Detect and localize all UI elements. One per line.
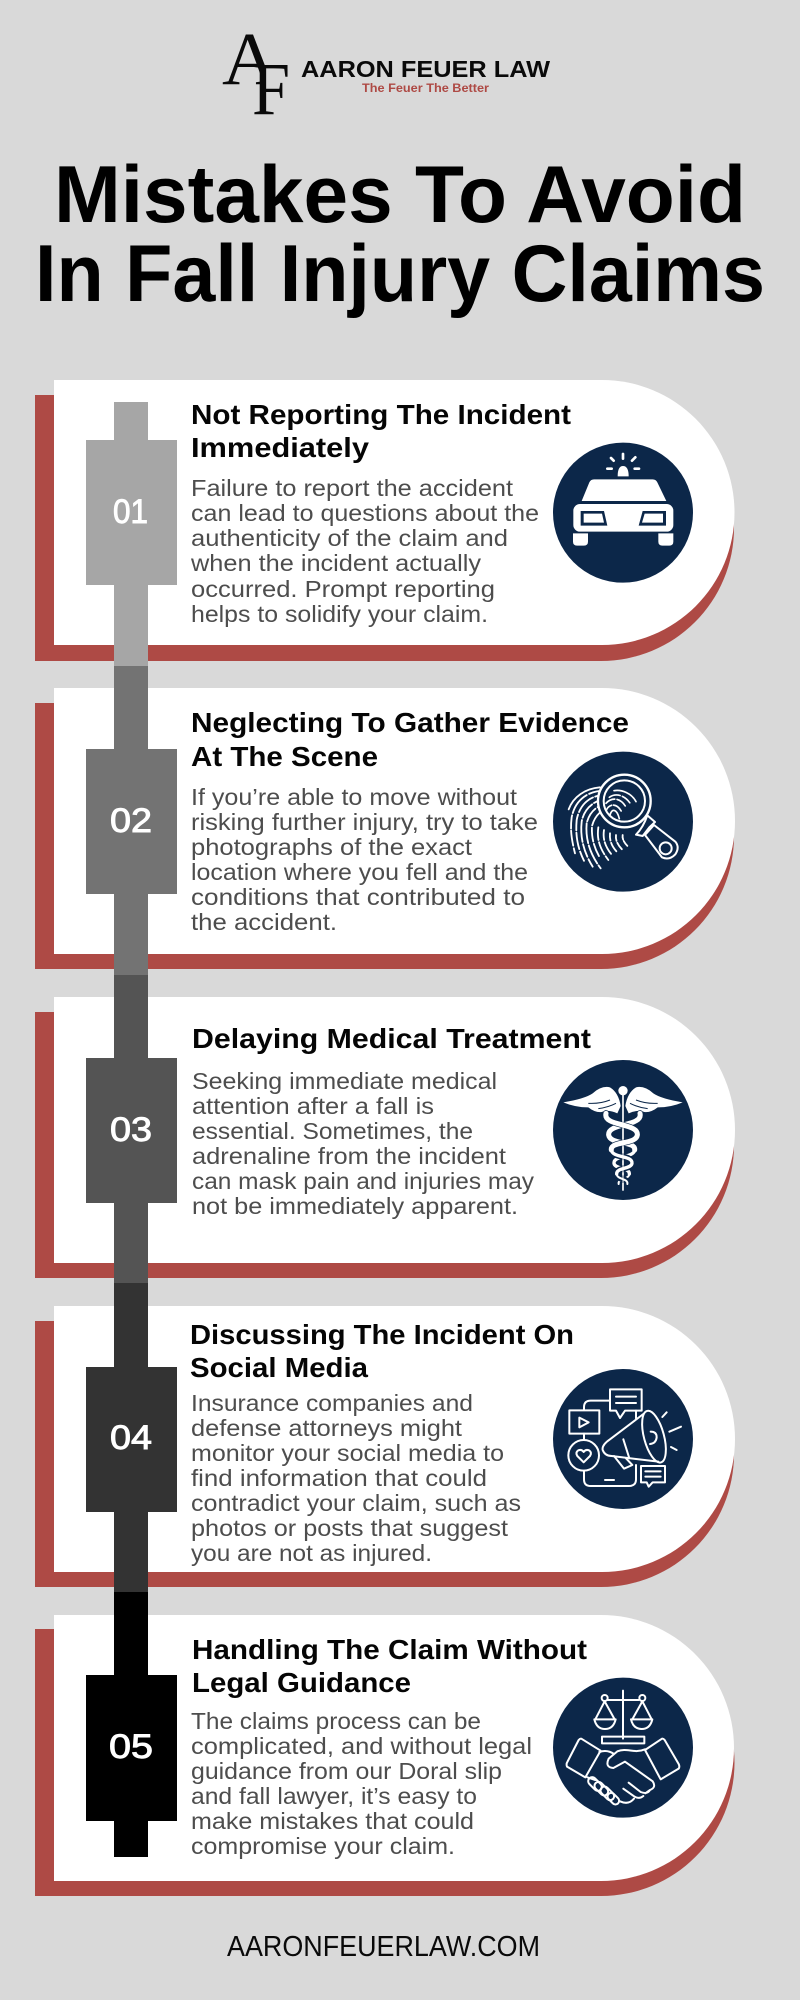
heading 04: Discussing The Incident On (190, 1319, 574, 1350)
logo monogram (222, 34, 288, 114)
title (35, 150, 765, 319)
heading 02: Neglecting To Gather Evidence (191, 707, 629, 738)
body text 03: attention after a fall is (192, 1093, 434, 1119)
heading 04 (190, 1319, 574, 1383)
body text 02: risking further injury, try to take (191, 809, 538, 835)
body text 04 (191, 1390, 521, 1566)
card background (54, 1615, 734, 1881)
heading 01: Not Reporting The Incident (191, 399, 571, 430)
card background (54, 380, 735, 645)
heading 01 (191, 399, 571, 463)
body text 05: make mistakes that could (191, 1808, 474, 1834)
body text 04: defense attorneys might (191, 1415, 463, 1441)
card background (54, 688, 735, 954)
icon: police car (553, 443, 693, 583)
body text 04: photos or posts that suggest (191, 1515, 509, 1541)
panel: mistake 04 (35, 1283, 735, 1592)
body text 03: can mask pain and injuries may (192, 1168, 535, 1194)
body text 03: adrenaline from the incident (192, 1143, 507, 1169)
number marker 03 (86, 975, 177, 1283)
number marker 04: 04 (110, 1419, 152, 1457)
logo tagline: The Feuer The Better (362, 83, 490, 95)
heading 05: Legal Guidance (192, 1667, 411, 1698)
icon: scales and handshake (553, 1678, 693, 1818)
body text 02 (191, 784, 538, 935)
body text 04: monitor your social media to (191, 1440, 504, 1466)
heading 02: At The Scene (191, 741, 378, 772)
body text 02: the accident. (191, 909, 337, 935)
body text 05: compromise your claim. (191, 1833, 455, 1859)
heading 01: Immediately (191, 432, 369, 463)
card shadow (35, 1321, 734, 1587)
icon: caduceus (553, 1060, 693, 1200)
body text 02: location where you fell and the (191, 859, 528, 885)
body text 04: contradict your claim, such as (191, 1490, 521, 1516)
card shadow (35, 1012, 734, 1278)
heading 03: Delaying Medical Treatment (192, 1023, 591, 1054)
panel: mistake 03 (35, 975, 735, 1283)
title: Mistakes To Avoid (54, 150, 746, 240)
icon: fingerprint under magnifier (553, 752, 693, 892)
body text 05: and fall lawyer, it’s easy to (191, 1783, 477, 1809)
card shadow (35, 395, 734, 661)
number marker 01: 01 (113, 493, 148, 531)
panel: mistake 01 (35, 380, 735, 666)
panel: mistake 05 (35, 1592, 734, 1896)
card background (54, 997, 735, 1263)
logo monogram: F (252, 48, 290, 131)
body text 01: occurred. Prompt reporting (191, 576, 495, 602)
body text 02: If you’re able to move without (191, 784, 518, 810)
number marker 05: 05 (109, 1728, 153, 1766)
body text 04: you are not as injured. (191, 1540, 432, 1566)
body text 02: conditions that contributed to (191, 884, 525, 910)
number marker 02 (86, 666, 177, 975)
body text 01: authenticity of the claim and (191, 525, 508, 551)
body text 03 (192, 1068, 535, 1219)
logo (222, 34, 550, 114)
body text 01: can lead to questions about the (191, 500, 539, 526)
body text 02: photographs of the exact (191, 834, 473, 860)
logo monogram: A (222, 18, 278, 101)
number marker 05 (86, 1592, 177, 1857)
body text 05: The claims process can be (191, 1708, 481, 1734)
body text 03: Seeking immediate medical (192, 1068, 497, 1094)
body text 01: when the incident actually (190, 550, 482, 576)
heading 05 (192, 1634, 587, 1698)
number marker 03: 03 (110, 1111, 152, 1149)
heading 04: Social Media (190, 1352, 368, 1383)
body text 05 (191, 1708, 532, 1859)
footer url: AARONFEUERLAW.COM (227, 1931, 540, 1963)
heading 05: Handling The Claim Without (192, 1634, 587, 1665)
number marker 02: 02 (110, 802, 152, 840)
body text 01: Failure to report the accident (191, 475, 514, 501)
body text 04: find information that could (191, 1465, 487, 1491)
body text 03: essential. Sometimes, the (192, 1118, 473, 1144)
card background (54, 1306, 735, 1572)
card shadow (35, 1629, 734, 1896)
body text 01: helps to solidify your claim. (191, 601, 488, 627)
icon: phone and megaphone (553, 1369, 693, 1509)
body text 03: not be immediately apparent. (192, 1193, 518, 1219)
card shadow (35, 703, 734, 969)
heading 02 (191, 707, 629, 772)
body text 01 (190, 475, 539, 627)
panel: mistake 02 (35, 666, 735, 975)
title: In Fall Injury Claims (35, 229, 765, 319)
body text 04: Insurance companies and (191, 1390, 473, 1416)
number marker 04 (86, 1283, 177, 1592)
number marker 01 (86, 402, 177, 666)
logo wordmark: AARON FEUER LAW (301, 56, 550, 82)
body text 05: guidance from our Doral slip (191, 1758, 502, 1784)
body text 05: complicated, and without legal (191, 1733, 532, 1759)
